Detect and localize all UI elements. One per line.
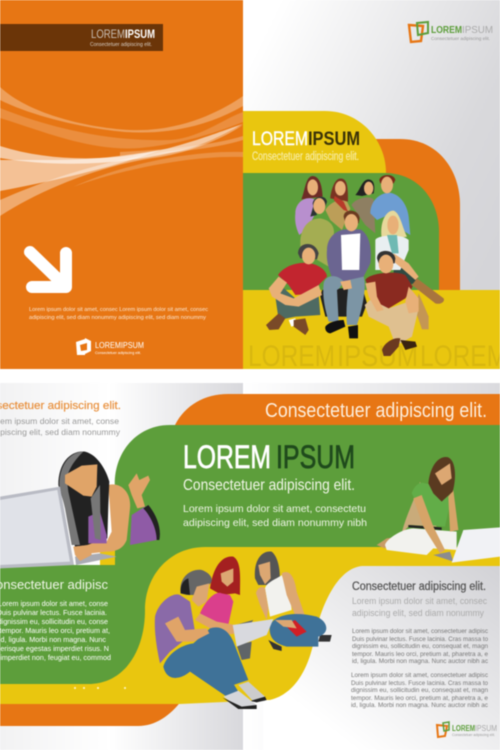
red haired girl — [195, 556, 252, 660]
man in purple — [155, 570, 267, 709]
illustration: girl lying with laptop — [0, 452, 160, 568]
watermark — [250, 346, 500, 366]
logo: bottom right: LOREM — [452, 724, 475, 733]
front left man red shirt — [266, 244, 327, 335]
text block: white panel: adipiscing elit, sed diam nonummy — [352, 608, 484, 618]
text block: green lower left — [0, 577, 111, 662]
panel: inside right background — [243, 383, 500, 750]
logo: LOREMIPSUM — [95, 341, 144, 350]
heading: IPSUM — [308, 128, 360, 150]
green tab — [243, 173, 439, 295]
arrow — [30, 252, 66, 287]
text block: white panel: id, ligula. Morbi non magna. Nunc auctor nibh ac — [352, 659, 488, 665]
girl in white — [255, 551, 332, 651]
main heading — [183, 439, 367, 529]
logo: bottom right: Consectetuer adipiscing elit. — [452, 733, 495, 737]
text block: white panel: dignissim eu, sollicitudin eu, consequat et, magn — [351, 688, 488, 694]
text block: white panel: tempor. Mauris leo orci, pretium at, pharetra a, e — [351, 696, 489, 702]
logo: bottom right: IPSUM — [475, 724, 497, 733]
main heading: Lorem ipsum dolor sit amet, consectetu — [183, 503, 366, 515]
text block: green lower left: id, ligula. Morbi non magna. Nunc — [0, 635, 106, 644]
text block: white panel: tempor. Mauris leo orci, pretium at, pharetra a, e — [352, 652, 489, 658]
panel: inside left background — [0, 383, 243, 750]
text block: white panel: Lorem ipsum dolor sit amet, consectetuer adipisc — [351, 673, 488, 679]
orange tab — [370, 139, 460, 295]
blonde woman — [375, 211, 444, 329]
main heading: LOREM — [183, 439, 271, 475]
text block: white panel: Duis pulvinar lectus. Fusce lacinia. Cras massa to — [352, 637, 489, 643]
text block: white panel: id, ligula. Morbi non magna. Nunc auctor nibh ac — [351, 703, 488, 709]
text block: upper left — [0, 400, 121, 437]
text block: white panel: Lorem ipsum dolor sit amet, consec — [352, 596, 487, 606]
white text panel — [263, 566, 500, 750]
back woman scarf — [325, 178, 350, 230]
watermark: IPSUM — [337, 340, 418, 373]
text block: green lower left: Duis pulvinar lectus. Fusce lacinia. — [0, 608, 107, 617]
green panel — [0, 425, 500, 684]
central man — [320, 211, 371, 338]
panel: back cover — [243, 0, 500, 373]
header bar: Consectetuer adipiscing elit. — [90, 42, 152, 48]
back man blue — [370, 175, 410, 235]
text block: white panel: Duis pulvinar lectus. Fusce lacinia. Cras massa to — [351, 681, 489, 687]
yellow heading tab — [243, 111, 386, 173]
illustration: three students — [155, 551, 332, 709]
logo: LOREM — [431, 25, 462, 36]
illustration: group of people — [266, 175, 444, 356]
text block: green lower left: Lorem ipsum dolor sit amet, conse — [0, 599, 108, 608]
logo — [76, 338, 144, 355]
logo — [409, 22, 493, 42]
back woman brown — [351, 179, 375, 233]
text block: white panel: dignissim eu, sollicitudin eu, consequat et, magn — [352, 644, 488, 650]
text block: green lower left: imperdiet non, feugiat eu, commod — [0, 653, 111, 662]
yellow band — [0, 547, 500, 704]
text block: white panel: Lorem ipsum dolor sit amet, consectetuer adipisc — [352, 629, 488, 635]
logo: IPSUM — [462, 25, 493, 36]
middle man green — [300, 197, 334, 267]
body text — [29, 307, 208, 321]
header bar: LOREM — [91, 27, 125, 41]
illustration: girl sitting with laptop — [377, 457, 500, 563]
heading: LOREM — [252, 128, 308, 150]
logo: bottom right — [437, 722, 497, 737]
main heading: Consectetuer adipiscing elit. — [183, 477, 355, 494]
heading: Consectetuer adipiscing elit. — [252, 151, 359, 163]
back woman lilac — [295, 176, 323, 235]
heading — [252, 128, 360, 163]
text block: white panel: Consectetuer adipiscing elit. — [352, 581, 486, 593]
orange top band — [175, 394, 500, 425]
header bar — [0, 24, 163, 51]
text block: green lower left: tempor. Mauris leo orci, pretium at, — [0, 626, 110, 635]
panel: front cover — [0, 0, 243, 369]
laptop — [233, 619, 273, 647]
body text: Lorem ipsum dolor sit amet, consec Lorem ipsum dolor sit amet, consec — [29, 307, 208, 313]
body text: adipiscing elit, sed diam nonummy adipiscing elit, sed diam nonummy — [29, 315, 206, 321]
watermark: LOREM — [248, 340, 335, 373]
white swoosh waves — [0, 87, 243, 216]
orange bottom band — [0, 700, 182, 726]
logo: Consectetuer adipiscing elit. — [95, 350, 141, 355]
yellow floor — [243, 290, 500, 369]
main heading: IPSUM — [276, 439, 355, 475]
text block: green lower left: dignissim eu, sollicitudin eu, conse — [0, 617, 108, 626]
header bar: IPSUM — [125, 27, 155, 41]
main heading: adipiscing elit, sed diam nonummy nibh — [183, 517, 367, 529]
text block: white panel — [351, 581, 489, 709]
logo: Consectetuer adipiscing elit. — [431, 36, 490, 42]
front right man dark red — [365, 251, 419, 356]
dots — [74, 687, 126, 689]
